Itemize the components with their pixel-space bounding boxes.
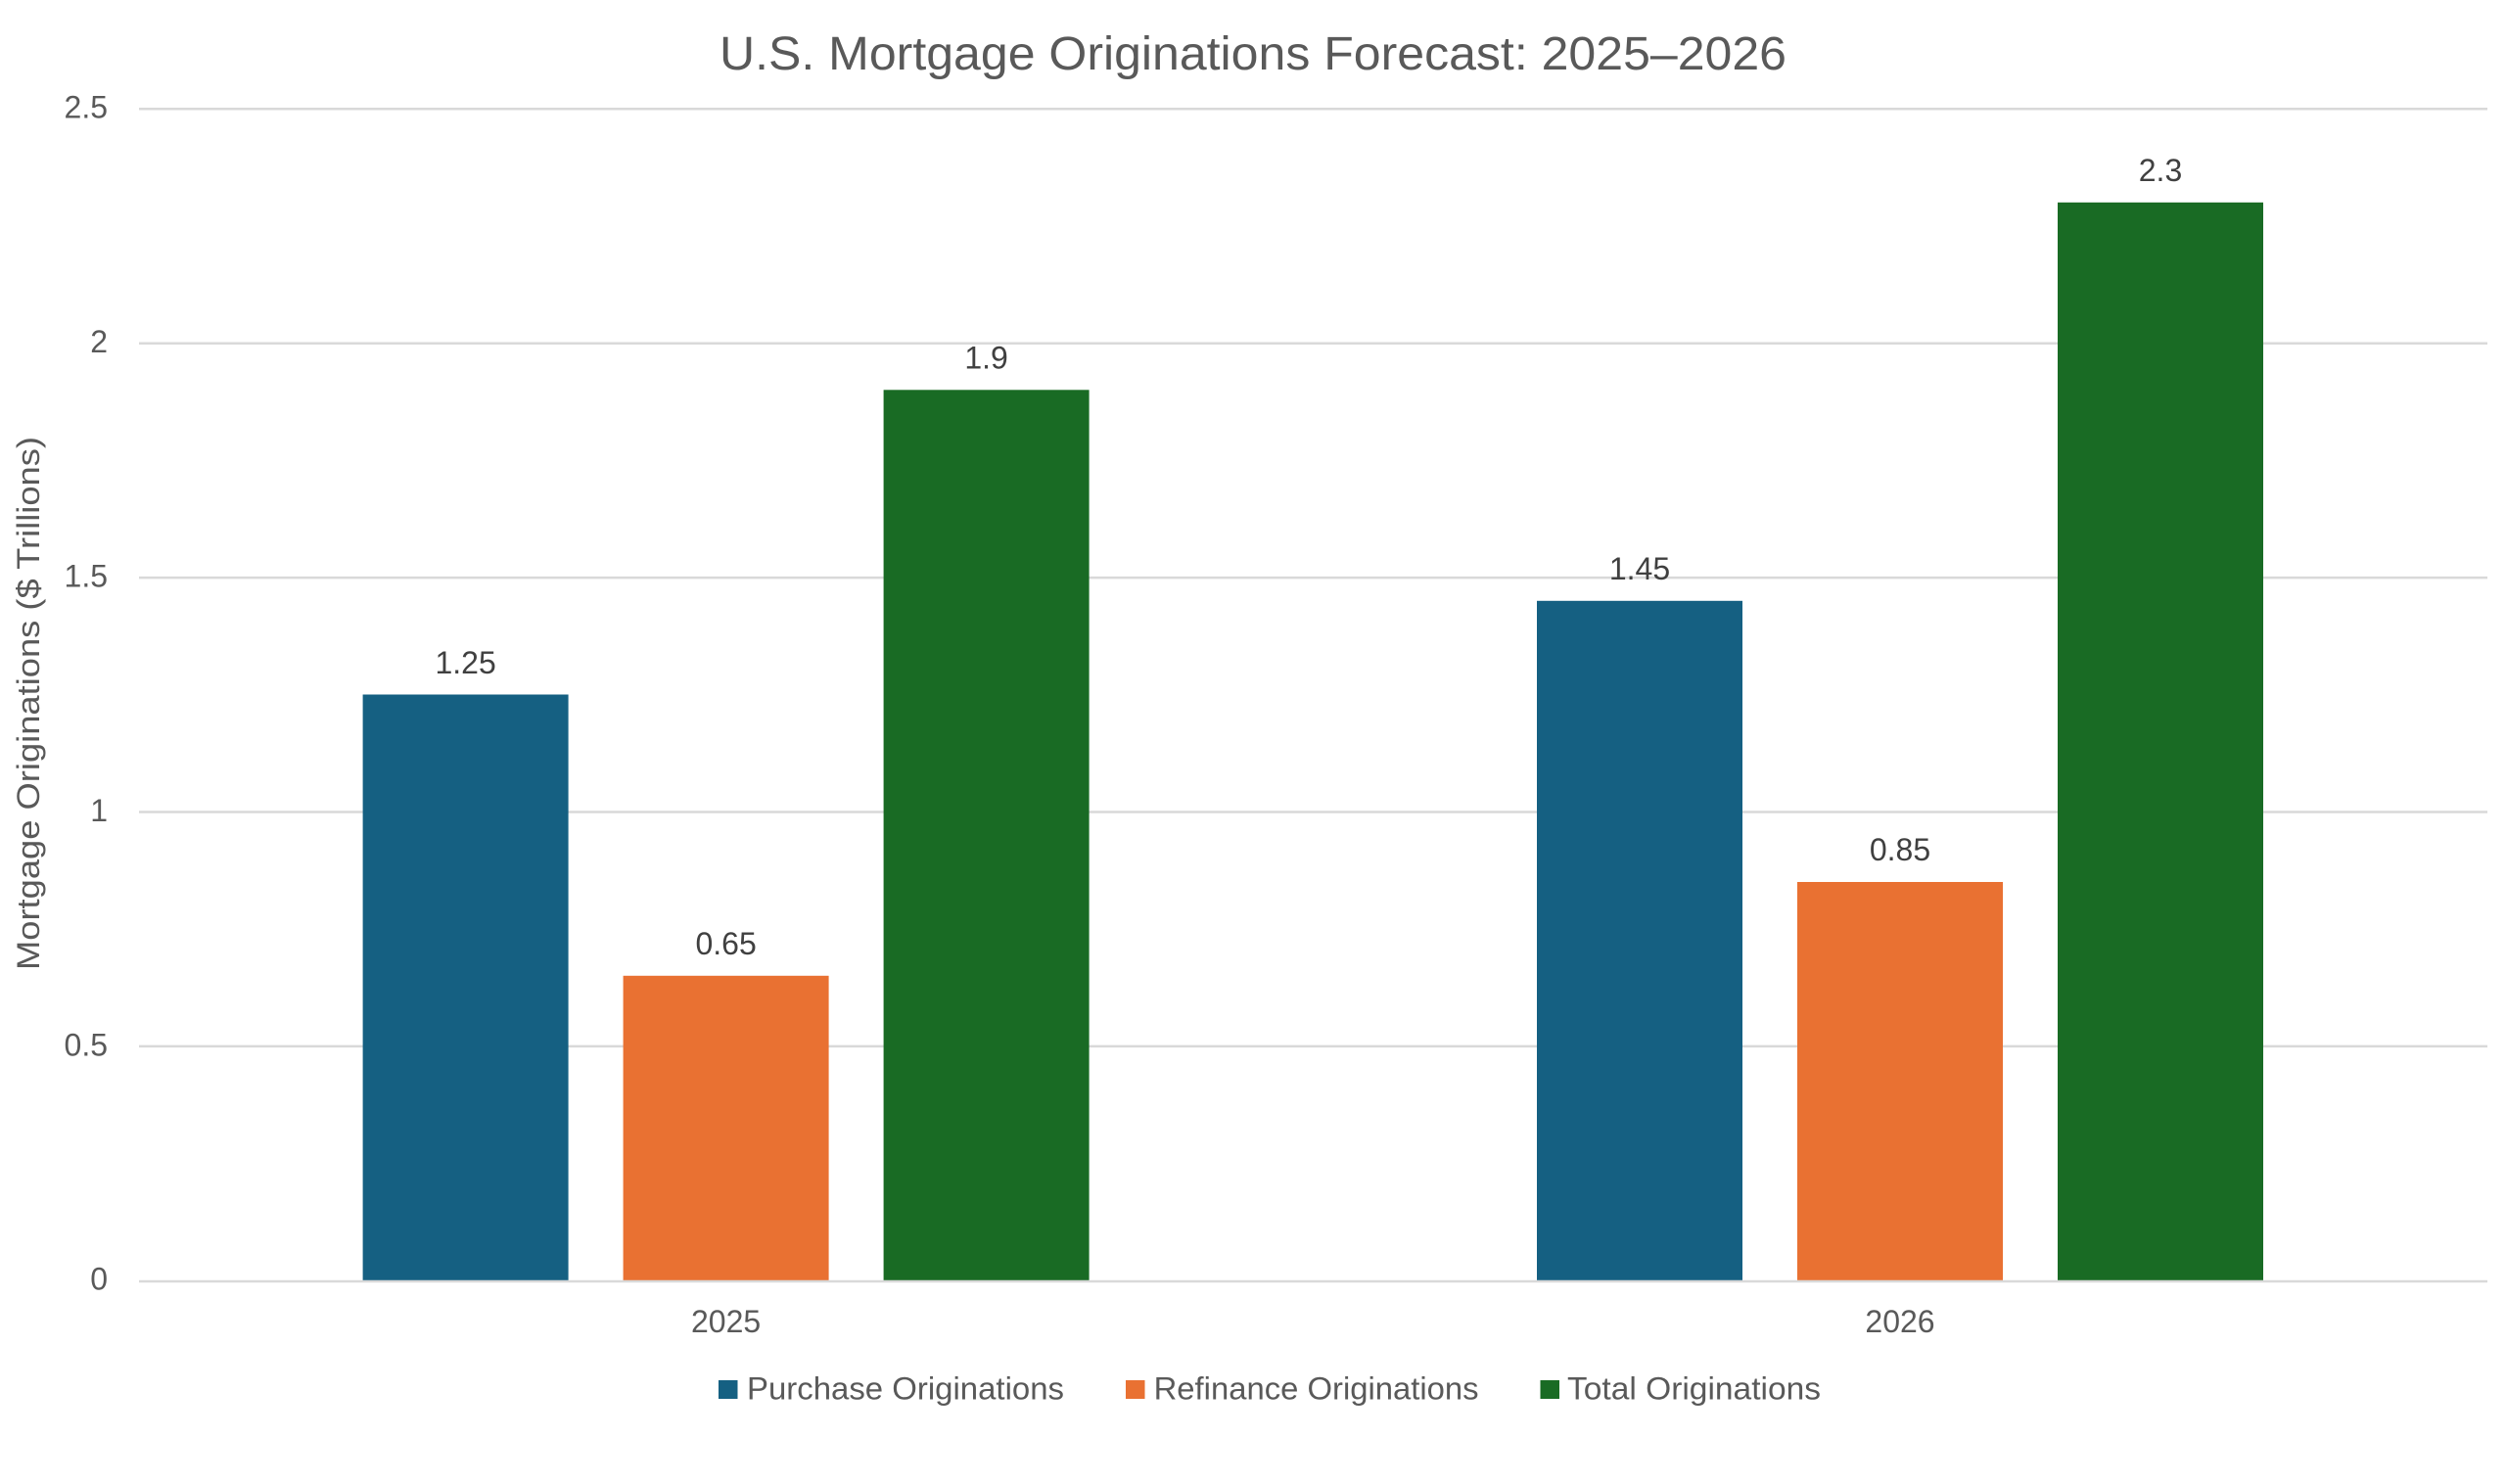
title: U.S. Mortgage Originations Forecast: 2025–2026 [719,28,1787,80]
y axis tick labels: 0 [90,1262,108,1297]
y axis tick labels: 1.5 [65,558,108,593]
y axis tick labels: 0.5 [65,1027,108,1062]
bar: 2025 total [884,390,1090,1280]
data labels: 1.9 [964,341,1008,376]
bars: 2025 group [363,390,1090,1280]
y axis tick labels: 1 [90,793,108,828]
y axis title: Mortgage Originations ($ Trillions) [11,437,46,970]
x axis category labels: 2025 [691,1304,761,1339]
data labels: 0.85 [1870,832,1930,867]
y axis tick labels: 2 [90,324,108,359]
data labels [435,153,2182,961]
bar: 2025 purchase [363,695,569,1280]
legend item: purchase: Purchase Originations [747,1370,1064,1406]
bar: 2026 total [2058,203,2263,1280]
x axis line [139,1280,2487,1282]
bars: 2026 group [1537,203,2263,1280]
x axis category labels [691,1304,1935,1339]
x axis category labels: 2026 [1865,1304,1935,1339]
data labels: 1.45 [1609,551,1670,586]
legend item: refinance: Refinance Originations [1154,1370,1479,1406]
bar: 2026 refinance [1797,882,2003,1280]
bar: 2025 refinance [624,976,829,1280]
y axis tick labels: 2.5 [65,90,108,125]
bar: 2026 purchase [1537,601,1742,1280]
data labels: 1.25 [435,645,496,680]
legend item: total: Total Originations [1567,1370,1821,1406]
data labels: 2.3 [2139,153,2182,188]
legend [719,1370,1821,1406]
y axis tick labels [65,90,108,1297]
data labels: 0.65 [695,926,757,961]
